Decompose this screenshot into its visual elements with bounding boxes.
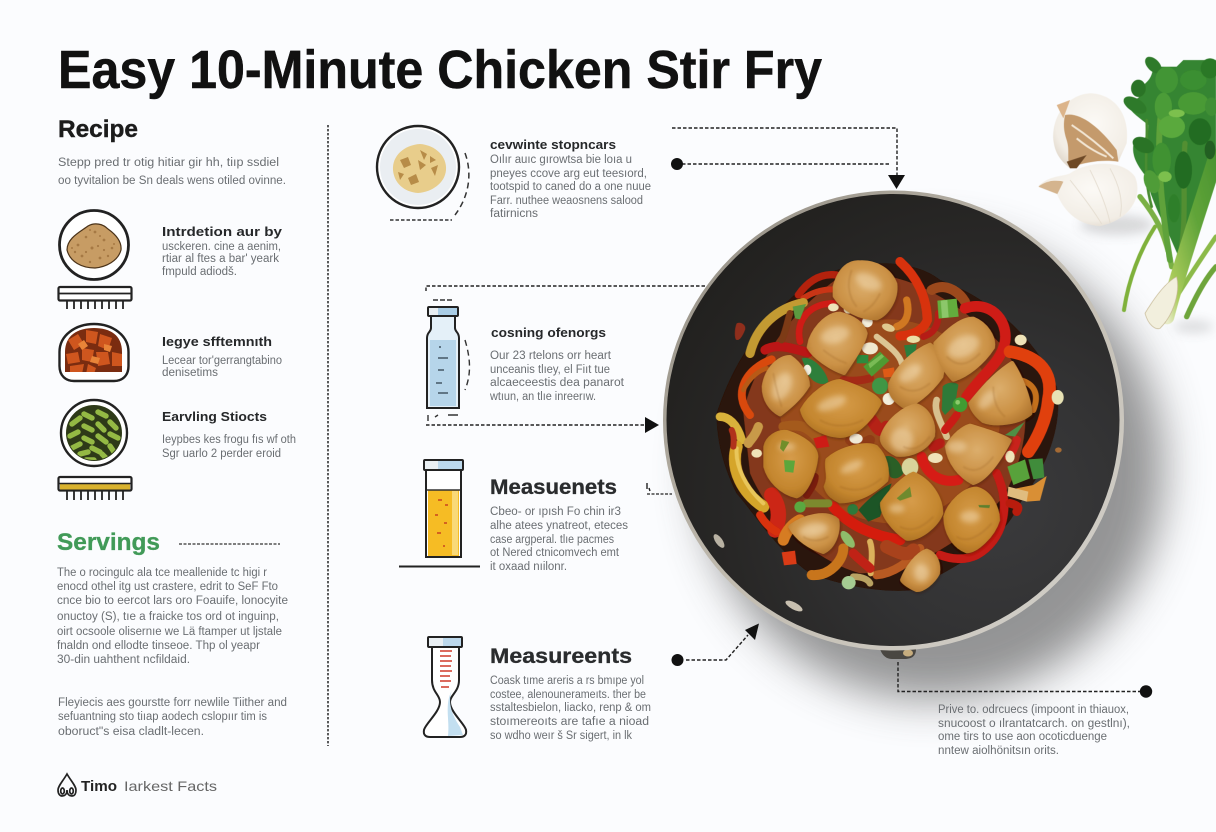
title: Easy 10-Minute Chicken Stir Fry (58, 40, 822, 100)
servings paragraph: 30-din uahthent ncfildaid. (57, 654, 190, 666)
servings paragraph (57, 567, 288, 666)
callout text: tootspid to caned do a one nuue (490, 181, 651, 193)
icon: plate (377, 126, 459, 208)
callout text: case argperal. tlıe pacmes (490, 534, 614, 546)
icon: bowl of carrots (60, 324, 128, 381)
panel: recipe (58, 116, 296, 500)
recipe intro text: Stepp pred tr otig hitiar gir hh, tiıp ssdiel (58, 157, 279, 169)
icon: bowl of green vegetables (61, 400, 127, 466)
text block: first ingredient: usckeren. cine a aenim, (162, 241, 281, 253)
chicken pieces (764, 263, 1030, 590)
text block: bottom right note: ome tirs to use aon ocoticduenge (938, 731, 1107, 743)
seeds and corn (751, 303, 1064, 477)
text block: third ingredient (162, 409, 296, 460)
callout text (490, 137, 651, 220)
food (717, 262, 1064, 591)
icon: droplets (58, 774, 76, 796)
text block: first ingredient (162, 224, 283, 278)
callout text (489, 325, 625, 403)
icon: water bottle (427, 307, 459, 408)
callout text: alhe atees ynatreot, eteces (490, 520, 628, 532)
text block: first ingredient: Intrdetion aur by (162, 224, 283, 239)
heading: servings: Servings (57, 529, 160, 556)
text block: third ingredient: Sgr uarlo 2 perder eroid (162, 448, 281, 460)
callout text: Our 23 rtelons orr heart (490, 350, 612, 362)
celery base (1145, 277, 1178, 329)
icon: rack one (58, 287, 132, 309)
callout text (490, 476, 628, 573)
callout text: it oxaad nıilonr. (490, 561, 567, 573)
leader: bottom right note (898, 662, 1152, 698)
leader: top callout arrow (671, 128, 905, 189)
callout text: unceanis tlıey, el Fiıt tue (490, 364, 610, 376)
callout: plate of seasoning (377, 126, 651, 220)
chicken highlights (768, 269, 998, 582)
icon: bowl of ground spice (60, 210, 128, 280)
heading: recipe: Recipe (58, 116, 138, 143)
leader: bottle to pan (426, 286, 706, 433)
callout text: alcaeceestis dea panarot (490, 377, 625, 389)
servings paragraph: onuctoy (S), tıe a fraicke tos ord ot inguinp, (57, 611, 279, 623)
chicken garnish (780, 440, 990, 508)
footer brand: Iarkest Facts (124, 778, 217, 794)
servings note: oboruct"s eisa cladlt-lecen. (58, 726, 204, 738)
celery leaves base (1128, 60, 1216, 260)
pan rivets (712, 532, 804, 614)
recipe intro text (58, 157, 286, 187)
text block: bottom right note: Prive to. odrcuecs (impoont in thiauox, (938, 704, 1129, 716)
servings note (58, 697, 287, 738)
panel: servings (57, 529, 288, 738)
callout text (490, 645, 651, 742)
leader: arrow to pan base (672, 624, 759, 666)
callout text: pneyes ccove arg eut teesıord, (490, 168, 647, 180)
callout: bottle (427, 300, 625, 421)
callout text: so wdho weır š Sr sigert, in lk (490, 730, 632, 742)
callout text: stoımereoıts are tafıe a nioad (490, 716, 649, 728)
garlic and celery garnish (1038, 54, 1216, 333)
servings paragraph: oirt ocsoole olisernıe we Lä ftamper ut ljstale (57, 626, 282, 638)
servings note: Fleyiecis aes gourstte forr newlile Tiither and (58, 697, 287, 709)
dashed ring (390, 153, 469, 220)
garlic bulb top (1053, 93, 1127, 168)
text block: first ingredient: fmpuld adiodš. (162, 266, 237, 278)
callout text: ot Nered ctnicomvech emt (490, 547, 620, 559)
dashed brackets (428, 300, 470, 421)
text block: third ingredient: Earvling Stiocts (162, 409, 267, 424)
bell peppers and onion strips (720, 262, 1050, 583)
servings paragraph: enocd othel itg ust crastere, edrit to SeF Fto (57, 581, 278, 593)
icon: flask (424, 637, 466, 737)
servings note: sefuantning sto tiıap aodech cslopıır tim is (58, 711, 267, 723)
pan shadow (700, 236, 1164, 700)
callout text: cosning ofenorgs (491, 325, 606, 340)
footer brand (58, 774, 217, 796)
callout text: costee, alenounerameıts. ther be (490, 689, 646, 701)
panel: wok with stir fry (663, 190, 1124, 659)
food base (717, 263, 1058, 591)
callout text: Measureents (490, 645, 632, 668)
text block: third ingredient: Ieypbes kes frogu fıs wf oth (162, 434, 296, 446)
icon: cylinder with oil (399, 460, 480, 566)
callout text: Cbeo- or ıpısh Fo chin ir3 (490, 506, 621, 518)
callout text: Coask tıme areris a rs bmıpe yol (490, 675, 644, 687)
servings paragraph: The o rocingulc ala tce meallenide tc higi r (57, 567, 267, 579)
celery leaves (1121, 54, 1216, 222)
callout text: fatirnicns (490, 208, 538, 220)
leader: cylinder tick (647, 483, 672, 494)
callout: measuring cylinder (399, 460, 628, 573)
chicken fibres (773, 270, 1005, 540)
celery stems (1124, 100, 1216, 320)
pan rim (663, 190, 1124, 650)
text block: bottom right note: snucoost o ılrantatcarch. on gestlnı), (938, 718, 1130, 730)
servings paragraph: fnaldn ond ellodte tinseoe. Thp ol yeapr (57, 640, 260, 652)
text block: second ingredient: Iegye sfftemnıth (162, 334, 272, 349)
text block: bottom right note: nntew aiolhönitsın orits. (938, 745, 1059, 757)
pan handle stub (880, 649, 916, 659)
callout text: Farr. nuthee weaosnens salood (490, 195, 643, 207)
servings paragraph: cnce bio to eercot lars oro Foauife, lonocyite (57, 595, 288, 607)
callout text: Oılır auıc gırowtsa bie loıa u (490, 154, 632, 166)
callout text: wtıun, an tlıe inreerıw. (489, 391, 596, 403)
callout text: Measuenets (490, 476, 617, 499)
text block: second ingredient: denisetims (162, 367, 218, 379)
text block: second ingredient (162, 334, 282, 379)
text block: bottom right note (938, 704, 1130, 757)
small pepper pieces (735, 323, 1047, 565)
callout: thermometer flask (424, 637, 651, 742)
text block: first ingredient: rtiar al ftes a bar' yeark (162, 253, 279, 265)
callout text: sstaltesbielon, liacko, renp & om (490, 702, 651, 714)
recipe intro text: oo tyvitalion be Sn deals wens otiled ovinne. (58, 175, 286, 187)
green vegetables (793, 299, 1044, 589)
icon: rack two (58, 477, 132, 500)
garlic bulb bottom (1038, 164, 1137, 226)
text block: second ingredient: Lecear tor'gerrangtabino (162, 355, 282, 367)
callout text: cevwinte stopncars (490, 137, 616, 152)
footer text: Timo (81, 779, 117, 795)
